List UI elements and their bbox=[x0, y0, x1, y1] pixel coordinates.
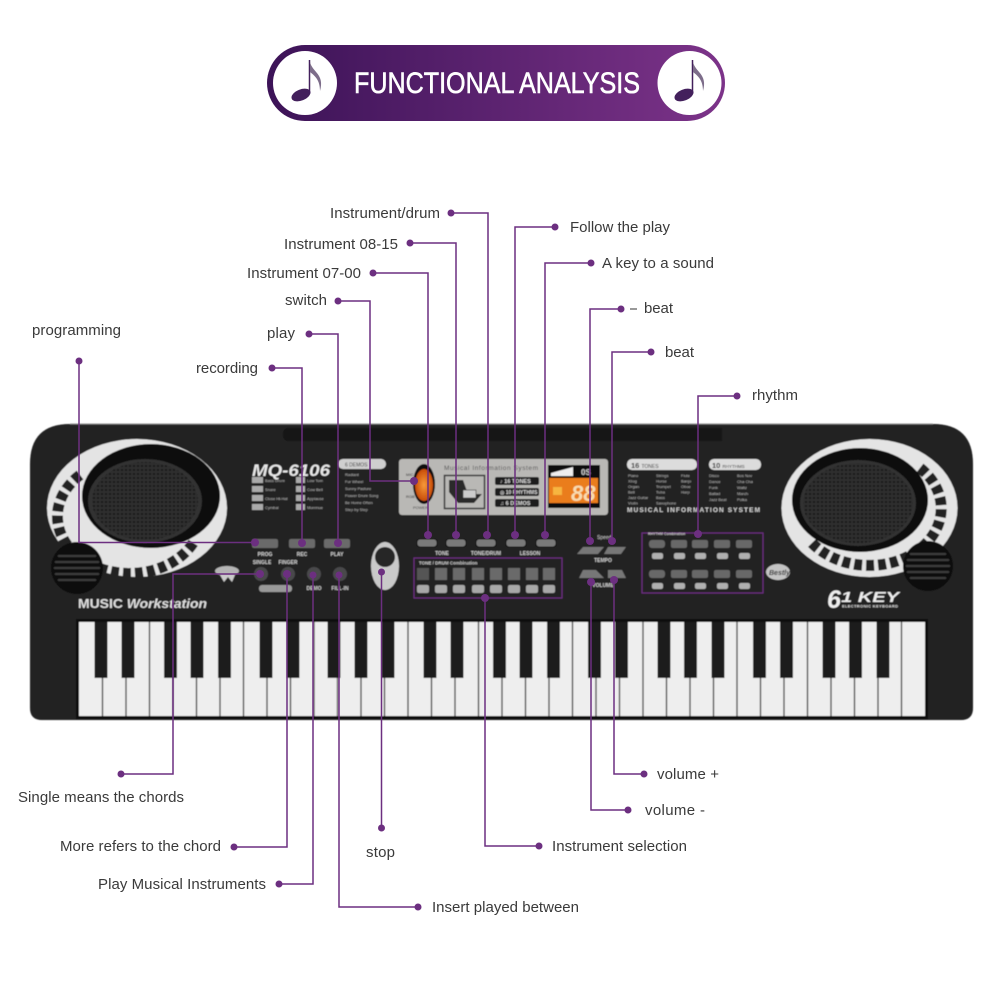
drum and demo lists: Low Tom bbox=[307, 478, 324, 483]
callout: rhythm bbox=[694, 387, 798, 538]
rhythm and tones lists: Waltz bbox=[737, 485, 747, 490]
drum and demo lists: Radiant bbox=[345, 472, 360, 477]
drum and demo lists: Be Home Often bbox=[345, 500, 373, 505]
tone and drum combination pads: TONE / DRUM Combination bbox=[419, 560, 478, 566]
model name: MQ-6106 bbox=[252, 461, 331, 480]
rhythm and tones lists: Dance bbox=[709, 479, 721, 484]
tone buttons: LESSON bbox=[520, 551, 541, 557]
display panel: 0S bbox=[581, 468, 591, 477]
stop knob bbox=[371, 542, 399, 590]
left control buttons: FINGER bbox=[279, 560, 298, 566]
callout: programming: programming bbox=[32, 322, 121, 339]
callout: single means the chords bbox=[18, 570, 264, 806]
callout: recording bbox=[196, 360, 306, 547]
keyboard body bbox=[30, 424, 973, 720]
tone buttons bbox=[417, 539, 556, 557]
callout: instrument selection: Instrument selection bbox=[552, 838, 687, 855]
rhythm and tones lists: Disco bbox=[709, 473, 720, 478]
left control buttons: FILL-IN bbox=[331, 586, 349, 592]
callout: instrument/drum: Instrument/drum bbox=[330, 205, 440, 222]
rhythm and tones lists: Bos Nov bbox=[737, 473, 752, 478]
callout: stop bbox=[366, 568, 395, 861]
drum and demo lists: Applause bbox=[307, 496, 324, 501]
callout: play musical instruments: Play Musical Instruments bbox=[98, 876, 266, 893]
callout: follow the play: Follow the play bbox=[570, 219, 670, 236]
heading text: FUNCTIONAL ANALYSIS bbox=[354, 67, 640, 100]
rhythm and tones lists: Trumpet bbox=[656, 484, 672, 489]
callout: play musical instruments bbox=[98, 572, 316, 893]
rhythm and tones lists: Ballad bbox=[709, 491, 720, 496]
rhythm and tones lists: Polka bbox=[737, 497, 748, 502]
left speaker bbox=[47, 439, 227, 577]
rhythm and tones lists: Flute bbox=[681, 473, 691, 478]
rhythm and tones lists: Funk bbox=[709, 485, 718, 490]
rhythm and tones lists: 16 TONES bbox=[631, 461, 659, 470]
callout: insert played between: Insert played between bbox=[432, 899, 579, 916]
callout: instrument 08-15 bbox=[284, 236, 460, 539]
drum and demo lists: Cow Bell bbox=[307, 487, 323, 492]
drum and demo lists: Step by Step bbox=[345, 507, 369, 512]
drum and demo lists: Flower Drum Song bbox=[345, 493, 378, 498]
brand badge: Bestly bbox=[769, 570, 791, 577]
drum and demo lists: Snare bbox=[265, 487, 276, 492]
callout: play: play bbox=[267, 325, 296, 342]
left small speaker bbox=[51, 542, 103, 594]
display panel: ◎ 10 RHYTHMS bbox=[500, 490, 538, 496]
tone buttons: TONE bbox=[435, 551, 450, 557]
drum and demo lists: Morrmue bbox=[307, 505, 324, 510]
rhythm and tones lists: Saxophone bbox=[656, 500, 677, 506]
rhythm and tones lists: Jazz Guitar bbox=[628, 495, 649, 500]
rhythm and tones lists: Jazz Beat bbox=[709, 497, 727, 502]
display panel: Musical Information System bbox=[444, 465, 538, 472]
callout: switch: switch bbox=[285, 292, 327, 309]
rhythm and tones lists: Xilog bbox=[628, 478, 637, 484]
callout: beat (tempo up): beat bbox=[665, 344, 695, 361]
callout: volume minus bbox=[587, 578, 705, 819]
icon: music note right bbox=[658, 51, 722, 115]
mode labels bbox=[495, 477, 539, 485]
rhythm combination pads bbox=[642, 532, 763, 593]
callout: instrument 07-00 bbox=[247, 265, 432, 539]
rhythm and tones lists: Horse bbox=[656, 478, 667, 484]
rhythm combination pads: RHYTHM Combination bbox=[648, 532, 685, 536]
rhythm and tones lists: Harp bbox=[681, 490, 690, 494]
display panel: MIC bbox=[406, 472, 413, 477]
left control buttons: SINGLE bbox=[253, 560, 272, 566]
left control buttons: PLAY bbox=[331, 552, 344, 558]
callout: volume plus: volume + bbox=[657, 766, 719, 783]
keyboard bbox=[30, 424, 973, 720]
callout: instrument 07-00: Instrument 07-00 bbox=[247, 265, 361, 282]
callout: volume minus: volume - bbox=[645, 802, 705, 819]
callout: recording: recording bbox=[196, 360, 258, 377]
61 key logo: 1 KEY bbox=[841, 589, 902, 606]
display panel: RGB bbox=[406, 494, 415, 499]
tone and drum combination pads bbox=[414, 558, 562, 598]
drum and demo lists: 6 DEMOS bbox=[345, 462, 368, 468]
tempo and volume controls bbox=[577, 535, 626, 589]
tempo and volume controls: Speed bbox=[597, 535, 612, 541]
rhythm and tones lists: Violin bbox=[628, 500, 638, 506]
rhythm and tones lists: Bell bbox=[628, 490, 635, 494]
callout: more refers to the chord bbox=[60, 570, 291, 855]
brand badge bbox=[766, 564, 791, 580]
piano keys bbox=[76, 619, 928, 719]
drum and demo lists: Close Hi-Hat bbox=[265, 496, 289, 501]
rhythm and tones lists: Oboe bbox=[681, 484, 692, 489]
rhythm and tones lists bbox=[627, 459, 761, 514]
rhythm and tones lists: Cha Cha bbox=[737, 479, 754, 484]
display panel: POWER bbox=[413, 505, 428, 510]
right small speaker bbox=[903, 541, 953, 591]
rhythm and tones lists: 10 RHYTHMS bbox=[712, 461, 745, 470]
61 key logo: 6 bbox=[827, 586, 842, 614]
callout: a key to a sound: A key to a sound bbox=[602, 255, 714, 272]
tempo and volume controls: VOLUME bbox=[592, 583, 614, 589]
drum and demo lists bbox=[252, 459, 386, 512]
rhythm and tones lists: Piano bbox=[628, 473, 639, 478]
tempo and volume controls: TEMPO bbox=[594, 558, 612, 564]
callout: instrument 08-15: Instrument 08-15 bbox=[284, 236, 398, 253]
callout: beat (tempo down) bbox=[586, 300, 674, 545]
rhythm and tones lists: Banjo bbox=[681, 478, 692, 484]
icon: music note left bbox=[273, 51, 337, 115]
left control buttons: PROG bbox=[258, 552, 272, 558]
display panel bbox=[399, 459, 608, 515]
callout: switch bbox=[285, 292, 418, 485]
drum and demo lists: Sunny Pasture bbox=[345, 486, 372, 491]
callout: instrument/drum bbox=[330, 205, 491, 539]
rhythm and tones lists: Tuba bbox=[656, 490, 666, 494]
LCD screen bbox=[548, 465, 600, 508]
callout: stop: stop bbox=[366, 844, 395, 861]
callout: beat (tempo up) bbox=[608, 344, 695, 545]
drum and demo lists: Bass Drum bbox=[265, 478, 285, 483]
power button bbox=[413, 464, 435, 504]
display panel: ♪ 16 TONES bbox=[500, 479, 531, 485]
tone buttons: TONE/DRUM bbox=[471, 551, 501, 557]
title banner bbox=[267, 45, 725, 121]
callout: beat (tempo down): beat bbox=[644, 300, 674, 317]
left control buttons bbox=[215, 539, 350, 592]
61 key logo bbox=[827, 586, 902, 614]
rhythm and tones lists: Bass bbox=[656, 495, 665, 500]
callout: single means the chords: Single means the chords bbox=[18, 789, 184, 806]
callout: more refers to the chord: More refers to the chord bbox=[60, 838, 221, 855]
display panel: 88 bbox=[571, 481, 596, 506]
callout: instrument selection bbox=[481, 594, 687, 855]
right speaker bbox=[782, 439, 958, 577]
rhythm and tones lists: Organ bbox=[628, 484, 639, 489]
left control buttons: DEMO bbox=[306, 586, 322, 592]
music workstation logo: MUSIC Workstation bbox=[78, 597, 207, 611]
callout: volume plus bbox=[610, 576, 719, 783]
left control buttons: REC bbox=[297, 552, 308, 558]
rhythm and tones lists: Strings bbox=[656, 473, 668, 478]
drum and demo lists: Cymbal bbox=[265, 505, 279, 510]
display panel: ♫ 6 DEMOS bbox=[500, 501, 531, 507]
callout: play bbox=[267, 325, 342, 547]
rhythm and tones lists: MUSICAL INFORMATION SYSTEM bbox=[627, 507, 760, 514]
61 key logo: ELECTRONIC KEYBOARD bbox=[842, 604, 898, 608]
callout: rhythm: rhythm bbox=[752, 387, 798, 404]
drum and demo lists: Fur Wheel bbox=[345, 479, 364, 484]
callout: a key to a sound bbox=[541, 255, 714, 539]
laptop icon bbox=[444, 476, 484, 508]
music stand slot bbox=[283, 428, 722, 441]
callout: programming bbox=[32, 322, 259, 546]
rhythm and tones lists: March bbox=[737, 491, 748, 496]
callout: insert played between bbox=[336, 572, 579, 916]
callout: follow the play bbox=[511, 219, 670, 539]
